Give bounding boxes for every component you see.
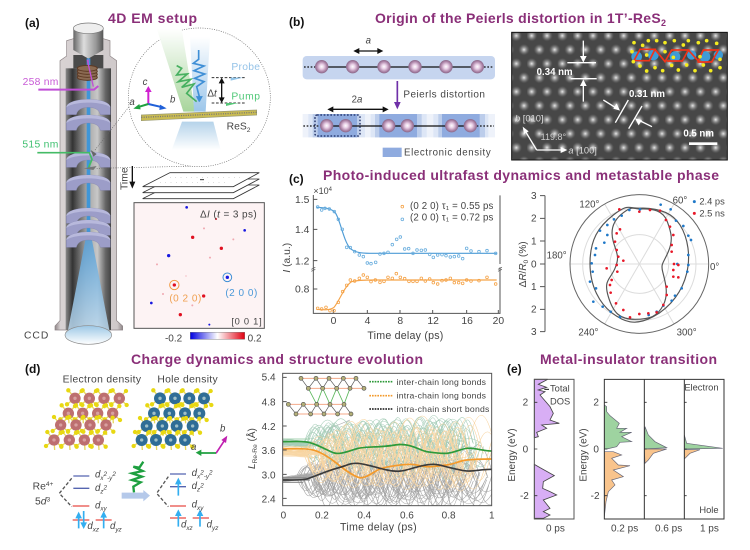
title: metal-insulator transition: Metal-insulator transition bbox=[540, 351, 717, 367]
electron and hole DOS plots: Electron bbox=[684, 383, 719, 393]
atom model overlay bbox=[630, 39, 723, 73]
radial axis: 0 bbox=[523, 259, 530, 263]
x axis labels bbox=[281, 510, 495, 533]
y tick labels: 3.0 bbox=[262, 470, 276, 481]
lattice annotations bbox=[515, 41, 717, 155]
delta t marker: Probe bbox=[231, 62, 260, 73]
title: 4D EM setup: 4D EM setup bbox=[108, 10, 197, 26]
colour bar: 0.2 bbox=[248, 333, 262, 344]
electromagnetic lenses bbox=[66, 99, 110, 247]
orbital diagram before excitation: xz bbox=[92, 526, 100, 533]
orbital diagram after excitation bbox=[157, 468, 219, 532]
delta t marker: 2 bbox=[247, 127, 251, 134]
radial axis: 2 bbox=[531, 305, 537, 316]
diffraction difference pattern: (2 0 0) bbox=[225, 288, 257, 299]
lattice annotations: 0.34 nm bbox=[537, 67, 573, 78]
undistorted chain bbox=[303, 35, 495, 79]
radial axis: 0 bbox=[531, 259, 537, 270]
total DOS plot: 0 ps bbox=[546, 523, 565, 534]
orbital diagram after excitation: d bbox=[192, 481, 197, 492]
lattice axes: a bbox=[191, 442, 197, 453]
y axis title: L bbox=[247, 463, 258, 469]
axis labels: 1.5 bbox=[295, 195, 310, 206]
orbital diagram before excitation: 5d bbox=[35, 497, 46, 508]
total DOS plot bbox=[507, 379, 574, 534]
orbital diagram before excitation: 3 bbox=[46, 496, 50, 503]
orbital diagram after excitation: d bbox=[207, 520, 212, 531]
hole density caption: Hole density bbox=[157, 375, 218, 386]
orbital diagram after excitation: 2 bbox=[199, 482, 204, 489]
chart legend bbox=[401, 201, 494, 224]
y tick labels: 2.4 bbox=[262, 494, 276, 505]
axis labels: 0.8 bbox=[295, 285, 310, 296]
electronic density legend: Electronic density bbox=[404, 148, 491, 159]
pump and probe laser lines bbox=[22, 60, 98, 170]
orbital diagram before excitation: 4+ bbox=[46, 481, 54, 488]
zoom guide dashed lines bbox=[95, 103, 200, 168]
total DOS plot: 0 bbox=[523, 444, 529, 455]
zoomed inset circle bbox=[128, 28, 270, 167]
orbital diagram before excitation: d bbox=[95, 483, 100, 494]
lattice annotations: 119.8° bbox=[541, 132, 566, 142]
polar angle labels: 240° bbox=[578, 328, 598, 339]
red data points bbox=[605, 208, 680, 319]
crystal axes bbox=[129, 77, 176, 110]
lattice axes bbox=[191, 424, 227, 456]
panel: diffraction intensity chart bbox=[282, 186, 504, 342]
bond legend: intra-chain long bonds bbox=[397, 390, 487, 400]
axis labels: 20 bbox=[493, 316, 504, 327]
panel label (b): (b) bbox=[289, 15, 304, 29]
delta t marker: Δt bbox=[207, 89, 218, 100]
radial axis: 3 bbox=[531, 191, 537, 202]
orbital diagram before excitation: 2 bbox=[111, 471, 116, 478]
diffraction difference pattern: ΔI (t = 3 ps) bbox=[200, 209, 257, 220]
CCD label: CCD bbox=[24, 331, 48, 342]
STEM image bbox=[512, 32, 727, 160]
axis labels: 12 bbox=[427, 316, 439, 327]
x axis labels: 0 bbox=[281, 510, 287, 521]
bond legend: intra-chain short bonds bbox=[397, 404, 490, 414]
lattice axes: b bbox=[220, 424, 226, 435]
x axis labels: 0.8 bbox=[442, 510, 456, 521]
orbital diagram before excitation: yz bbox=[114, 526, 123, 533]
electron and hole DOS plots: 0 bbox=[593, 444, 599, 455]
pump and probe laser lines: 258 nm bbox=[23, 77, 58, 88]
electron and hole DOS plots: Energy (eV) bbox=[579, 428, 590, 482]
y tick labels bbox=[262, 373, 287, 505]
fits and data: 0 2 0 bbox=[316, 272, 497, 312]
panel label (a): (a) bbox=[25, 16, 40, 30]
orbital diagram after excitation: yz bbox=[211, 525, 219, 532]
excitation arrow and pump pulse bbox=[122, 462, 150, 501]
undistorted chain: a bbox=[366, 35, 372, 46]
electron and hole DOS plots: 0.2 ps bbox=[611, 523, 638, 534]
radial axis: ΔR/R bbox=[518, 263, 529, 287]
orbital diagram after excitation: 2 bbox=[208, 469, 213, 476]
axis labels: I (a.u.) bbox=[282, 243, 293, 273]
bond legend bbox=[369, 377, 490, 414]
axis labels: 4 bbox=[365, 316, 371, 327]
polar angle labels: 60° bbox=[673, 195, 687, 206]
orbital diagram after excitation: d bbox=[181, 520, 186, 531]
panel: density of states bbox=[507, 379, 724, 534]
axis labels bbox=[282, 186, 504, 342]
diffraction difference pattern: (0 2 0) bbox=[169, 294, 201, 305]
microscope column bbox=[55, 23, 123, 344]
panel: polar plot bbox=[518, 191, 725, 339]
stacked frames bbox=[143, 173, 259, 199]
crystal axes: b bbox=[170, 95, 176, 106]
polar legend: 2.5 ns bbox=[699, 209, 725, 219]
electron and hole DOS plots: -2 bbox=[591, 491, 600, 502]
total DOS plot: DOS bbox=[550, 396, 570, 406]
crystal axes: c bbox=[143, 77, 148, 88]
orbital diagram after excitation: x bbox=[196, 473, 201, 480]
electron and hole DOS plots: 1 ps bbox=[700, 523, 719, 534]
ensemble trajectories bbox=[283, 415, 492, 506]
panel: charge density and orbitals bbox=[33, 375, 227, 533]
x axis labels: 0.4 bbox=[357, 510, 372, 521]
ensemble mean lines bbox=[283, 441, 492, 480]
orbital diagram before excitation: xy bbox=[99, 506, 108, 513]
axis labels: 1.4 bbox=[295, 225, 310, 236]
crystal axes: a bbox=[129, 97, 135, 108]
orbital diagram after excitation: d bbox=[192, 468, 197, 479]
polar angle labels: 300° bbox=[677, 328, 697, 339]
orbital diagram after excitation: d bbox=[192, 500, 197, 511]
x axis labels: 0.2 bbox=[315, 510, 329, 521]
panel: 4D EM setup bbox=[22, 23, 270, 344]
orbital diagram after excitation: 2 bbox=[199, 469, 204, 476]
orbital diagram before excitation: d bbox=[87, 521, 93, 532]
electron and hole DOS plots: 0.6 ps bbox=[655, 523, 682, 534]
axis labels: ×10 bbox=[313, 186, 329, 196]
y tick labels: 5.4 bbox=[262, 373, 276, 384]
axis labels: Time delay (ps) bbox=[367, 330, 443, 342]
title: Peierls distortion: Origin of the Peierls distortion in 1T’-ReS bbox=[375, 10, 661, 26]
Peierls distortion arrow bbox=[394, 81, 485, 109]
y tick labels: 4.2 bbox=[262, 422, 276, 433]
lattice annotations: 0.5 nm bbox=[683, 128, 714, 139]
polar legend: 2.4 ps bbox=[699, 197, 725, 207]
total DOS plot: -2 bbox=[520, 491, 529, 502]
chart frame bbox=[283, 373, 492, 506]
panel label (e): (e) bbox=[507, 362, 522, 376]
radial axis: 3 bbox=[531, 327, 537, 338]
fit curves bbox=[590, 207, 689, 322]
orbital diagram after excitation: xy bbox=[196, 505, 204, 512]
orbital diagram after excitation: xz bbox=[185, 525, 194, 532]
chart legend: (0 2 0) τ₁ = 0.55 ps bbox=[410, 201, 494, 212]
radial axis: (%) bbox=[518, 241, 529, 260]
x axis labels: Time delay (ps) bbox=[340, 521, 417, 533]
orbital diagram before excitation: 2 bbox=[103, 484, 108, 491]
total DOS plot: Energy (eV) bbox=[507, 428, 518, 482]
polar angle labels: 180° bbox=[547, 250, 567, 261]
chart legend: (2 0 0) τ₁ = 0.72 ps bbox=[410, 213, 494, 224]
axis labels: 4 bbox=[329, 187, 333, 193]
total DOS plot: 2 bbox=[523, 398, 529, 409]
title: ultrafast dynamics: Photo-induced ultrafast dynamics and metastable phase bbox=[323, 167, 719, 183]
density captions: Electron density bbox=[63, 375, 142, 386]
orbital diagram before excitation bbox=[33, 470, 123, 533]
diffraction difference pattern bbox=[134, 203, 264, 328]
electron and hole DOS plots bbox=[579, 379, 724, 534]
orbital diagram after excitation: -y bbox=[204, 473, 210, 480]
delta t marker: Pump bbox=[231, 91, 260, 102]
colour bar bbox=[165, 332, 262, 344]
x axis labels: 0.6 bbox=[400, 510, 414, 521]
blue data points bbox=[589, 203, 692, 318]
x axis labels: 1 bbox=[489, 510, 495, 521]
Peierls distortion arrow: Peierls distortion bbox=[403, 90, 485, 101]
panel: bond length evolution chart bbox=[245, 373, 513, 533]
bond lattice inset bbox=[286, 376, 366, 416]
delta t marker bbox=[207, 62, 260, 134]
orbital diagram before excitation: x bbox=[99, 475, 104, 482]
panel label (d): (d) bbox=[25, 362, 40, 376]
y axis title: (Å) bbox=[245, 428, 258, 444]
orbital diagram before excitation: z bbox=[99, 488, 104, 495]
y axis title: Re-Re bbox=[252, 444, 259, 463]
electron density lattice bbox=[44, 388, 129, 450]
orbital diagram before excitation: 2 bbox=[103, 471, 108, 478]
chart axes bbox=[311, 195, 502, 313]
polar legend bbox=[693, 197, 725, 219]
orbital diagram before excitation: d bbox=[95, 470, 100, 481]
orbital diagram before excitation: -y bbox=[107, 475, 113, 482]
radial axis bbox=[518, 191, 545, 338]
fits and data: 2 0 0 bbox=[316, 206, 497, 265]
radial axis: 1 bbox=[531, 282, 537, 293]
hole density lattice bbox=[131, 388, 213, 450]
radial axis: 2 bbox=[531, 214, 537, 225]
lattice annotations: b [010] bbox=[515, 114, 544, 124]
distorted chain: 2a bbox=[352, 95, 363, 106]
orbital diagram after excitation: z bbox=[196, 486, 201, 493]
distorted chain bbox=[303, 95, 495, 137]
axis labels: 8 bbox=[397, 316, 403, 327]
polar angle labels: 120° bbox=[579, 200, 599, 211]
axis labels: 0 bbox=[331, 316, 337, 327]
time arrow bbox=[120, 166, 135, 190]
title: charge dynamics: Charge dynamics and structure evolution bbox=[131, 351, 423, 367]
panel: Peierls chain schematic bbox=[303, 35, 495, 159]
total DOS plot: Total bbox=[550, 384, 570, 394]
time arrow: Time bbox=[120, 167, 131, 190]
delta t marker: ReS bbox=[227, 121, 247, 132]
electron and hole DOS plots: Hole bbox=[699, 505, 719, 515]
orbital diagram before excitation: d bbox=[95, 500, 100, 511]
electron and hole DOS plots: 2 bbox=[593, 398, 599, 409]
title: Peierls distortion: 2 bbox=[661, 18, 666, 28]
lattice annotations: a [100] bbox=[568, 145, 597, 155]
polar angle labels bbox=[547, 195, 719, 339]
axis labels: 1.2 bbox=[295, 256, 310, 267]
orbital diagram before excitation: d bbox=[110, 521, 115, 532]
panel label (c): (c) bbox=[289, 172, 304, 186]
pump and probe laser lines: 515 nm bbox=[22, 139, 58, 150]
bond legend: inter-chain long bonds bbox=[397, 377, 487, 387]
colour bar: -0.2 bbox=[165, 333, 183, 344]
axis labels: 16 bbox=[461, 316, 473, 327]
polar grid bbox=[570, 195, 709, 333]
y tick labels: 4.8 bbox=[262, 398, 276, 409]
diffraction difference pattern: [0 0 1] bbox=[231, 316, 262, 326]
polar angle labels: 0° bbox=[710, 262, 719, 273]
y tick labels: 3.6 bbox=[262, 446, 276, 457]
radial axis: 1 bbox=[531, 236, 537, 247]
lattice annotations: 0.31 nm bbox=[629, 89, 665, 100]
orbital diagram before excitation: Re bbox=[33, 481, 46, 492]
